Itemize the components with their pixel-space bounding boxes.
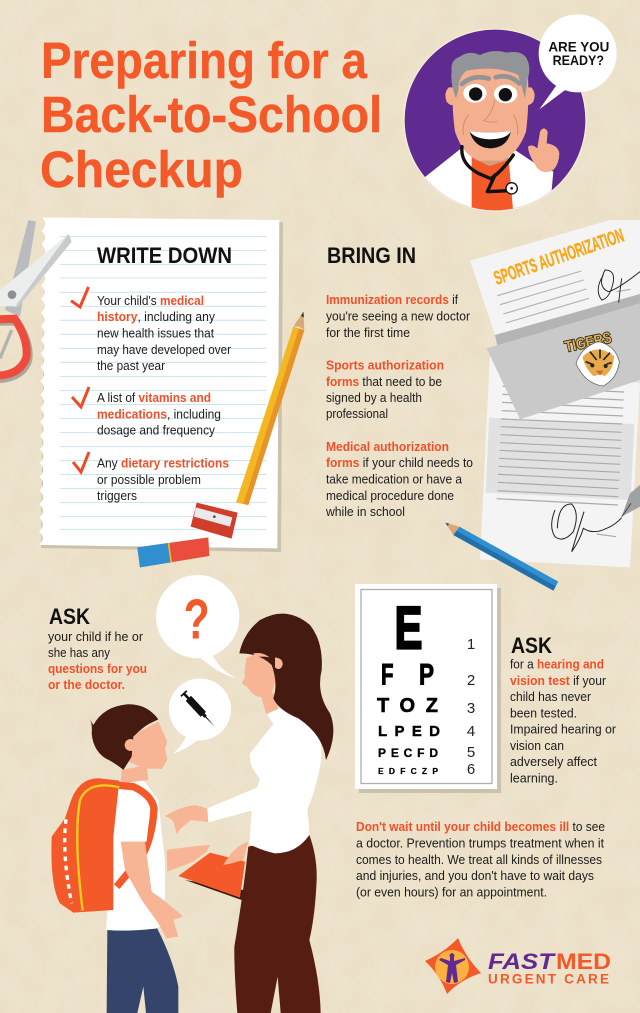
heading and text: ask your child: ASK: [49, 604, 90, 629]
heading and text: ask for a test: learning.: [510, 772, 558, 786]
text block: bring in list: professional: [326, 407, 388, 421]
checklist: [71, 287, 231, 503]
speech bubble: question: [156, 575, 239, 678]
chart row numbers: 5: [467, 744, 475, 761]
text block: bring in list: [325, 293, 473, 519]
text block: don't wait: Don't wait until your child becomes ill to see: [356, 820, 605, 834]
checklist: may have developed over: [97, 343, 231, 357]
logo wordmark: FAST: [488, 949, 556, 974]
lower form sheet: [480, 353, 640, 567]
chart letters: LPED: [378, 723, 440, 740]
chart row numbers: 3: [467, 700, 475, 717]
title: [40, 32, 382, 198]
logo wordmark: MED: [556, 949, 611, 974]
clipboard and hand: [178, 842, 248, 900]
speech bubble: READY?: [553, 52, 604, 68]
checklist: A list of vitamins and: [97, 391, 211, 405]
speech bubble: ARE YOU: [548, 39, 609, 55]
illustration: mother and child: [51, 575, 333, 1013]
logo: fastmed urgent care: [425, 938, 611, 994]
chart letters: E: [394, 594, 422, 662]
checklist: new health issues that: [97, 326, 214, 340]
heading and text: ask your child: or the doctor.: [48, 678, 125, 692]
chart row numbers: [467, 636, 475, 778]
text block: bring in list: while in school: [325, 505, 405, 519]
chart letters: [377, 594, 440, 776]
panel: write down note paper: [39, 217, 283, 552]
tigers mascot: [563, 329, 619, 386]
chart letters: TOZ: [377, 695, 438, 717]
speech bubble: [539, 14, 617, 109]
chart letters: PECFD: [378, 746, 438, 760]
heading and text: ask for a test: vision can: [510, 739, 564, 753]
checklist: or possible problem: [97, 473, 201, 487]
checklist: history, including any: [97, 310, 216, 324]
heading and text: ask for a test: been tested.: [510, 706, 577, 720]
heading and text: ask for a test: for a hearing and: [510, 658, 604, 672]
heading and text: ask for a test: ASK: [511, 633, 552, 658]
heading and text: ask for a test: [510, 633, 616, 786]
logo wordmark: [488, 949, 611, 986]
blue pencil: [445, 523, 558, 591]
woman: [165, 614, 333, 1013]
checklist: Any dietary restrictions: [97, 456, 229, 470]
checklist: the past year: [97, 359, 165, 373]
checklist: medications, including: [97, 408, 221, 422]
heading and text: ask for a test: Impaired hearing or: [510, 722, 616, 736]
text block: bring in list: Immunization records if: [326, 293, 458, 307]
chart row numbers: 1: [467, 636, 475, 653]
illustration: pencil, sharpener and eraser: [137, 312, 304, 567]
text block: bring in list: take medication or have a: [326, 472, 462, 486]
text block: bring in list: Sports authorization: [326, 358, 444, 372]
checklist: Your child's medical: [97, 294, 204, 308]
text block: bring in list: forms that need to be: [326, 375, 442, 389]
illustration: authorization forms: [445, 220, 640, 591]
text block: don't wait: (or even hours) for an appointment.: [356, 886, 547, 900]
text block: bring in list: for the first time: [326, 326, 410, 340]
logo mark: [425, 938, 481, 994]
heading and text: ask for a test: vision test if your: [510, 674, 606, 688]
text block: don't wait: a doctor. Prevention trumps treatment when it: [356, 836, 605, 850]
chart letters: EDFCZP: [378, 766, 438, 776]
text block: bring in list: forms if your child needs to: [326, 456, 473, 470]
text block: don't wait: comes to health. We treat all kinds of illnesses: [356, 853, 602, 867]
heading and text: ask your child: she has any: [48, 646, 111, 660]
checklist: dosage and frequency: [97, 424, 216, 438]
heading: bring in: BRING IN: [327, 243, 416, 268]
text block: bring in list: you're seeing a new doctor: [326, 310, 470, 324]
fountain pen: [622, 485, 640, 517]
chart row numbers: 6: [467, 761, 475, 778]
chart row numbers: 4: [467, 723, 475, 740]
title: Preparing for a: [41, 32, 368, 89]
heading and text: ask for a test: child has never: [510, 690, 591, 704]
chart letters: P: [419, 658, 434, 692]
text block: don't wait: and injuries, and you don't have to wait days: [356, 869, 594, 883]
boy: [51, 704, 210, 1013]
text block: bring in list: medical procedure done: [326, 489, 454, 503]
tigers mascot: TIGERS: [563, 329, 613, 356]
title: Checkup: [40, 141, 243, 198]
text block: bring in list: signed by a health: [326, 391, 422, 405]
heading and text: ask your child: questions for you: [48, 662, 147, 676]
illustration: scissors: [0, 220, 72, 379]
title: Back-to-School: [41, 86, 382, 143]
logo wordmark: URGENT CARE: [488, 972, 609, 986]
illustration: doctor with speech bubble: [403, 14, 617, 213]
panel: eye chart: [355, 584, 501, 793]
checklist: triggers: [97, 489, 137, 503]
text block: don't wait: [356, 820, 605, 900]
heading and text: ask for a test: adversely affect: [510, 755, 598, 769]
chart letters: F: [381, 658, 394, 692]
sports authorization sheet: [470, 220, 640, 419]
heading and text: ask your child: your child if he or: [48, 630, 143, 644]
speech bubble: question: ?: [184, 588, 210, 651]
text block: bring in list: Medical authorization: [326, 440, 449, 454]
heading and text: ask your child: [48, 604, 147, 692]
heading: write down: WRITE DOWN: [97, 243, 232, 268]
chart row numbers: 2: [467, 672, 475, 689]
speech bubble: syringe: [169, 678, 231, 754]
